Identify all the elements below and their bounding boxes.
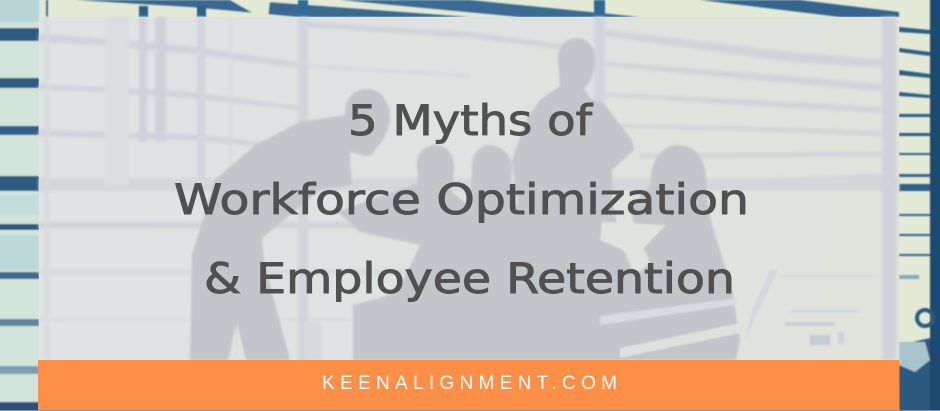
- bottom edge strip: [0, 410, 940, 411]
- title line 2: Workforce Optimization: [174, 175, 749, 224]
- title line 1: 5 Myths of: [348, 96, 593, 145]
- people silhouettes: [190, 38, 740, 360]
- website url: KEENALIGNMENT.COM: [322, 373, 617, 394]
- title: [174, 96, 749, 303]
- title line 3: & Employee Retention: [204, 254, 735, 303]
- translucent panel: [39, 17, 899, 362]
- person: seated right: [610, 145, 740, 360]
- highlights over silhouettes: [237, 222, 878, 360]
- person: seated left: [338, 145, 500, 360]
- person: standing center: [512, 38, 640, 360]
- person: seated middle: [470, 145, 560, 360]
- person: leaning man: [190, 89, 390, 360]
- window frame lines behind panel: [39, 17, 899, 362]
- orange footer bar: [38, 360, 899, 410]
